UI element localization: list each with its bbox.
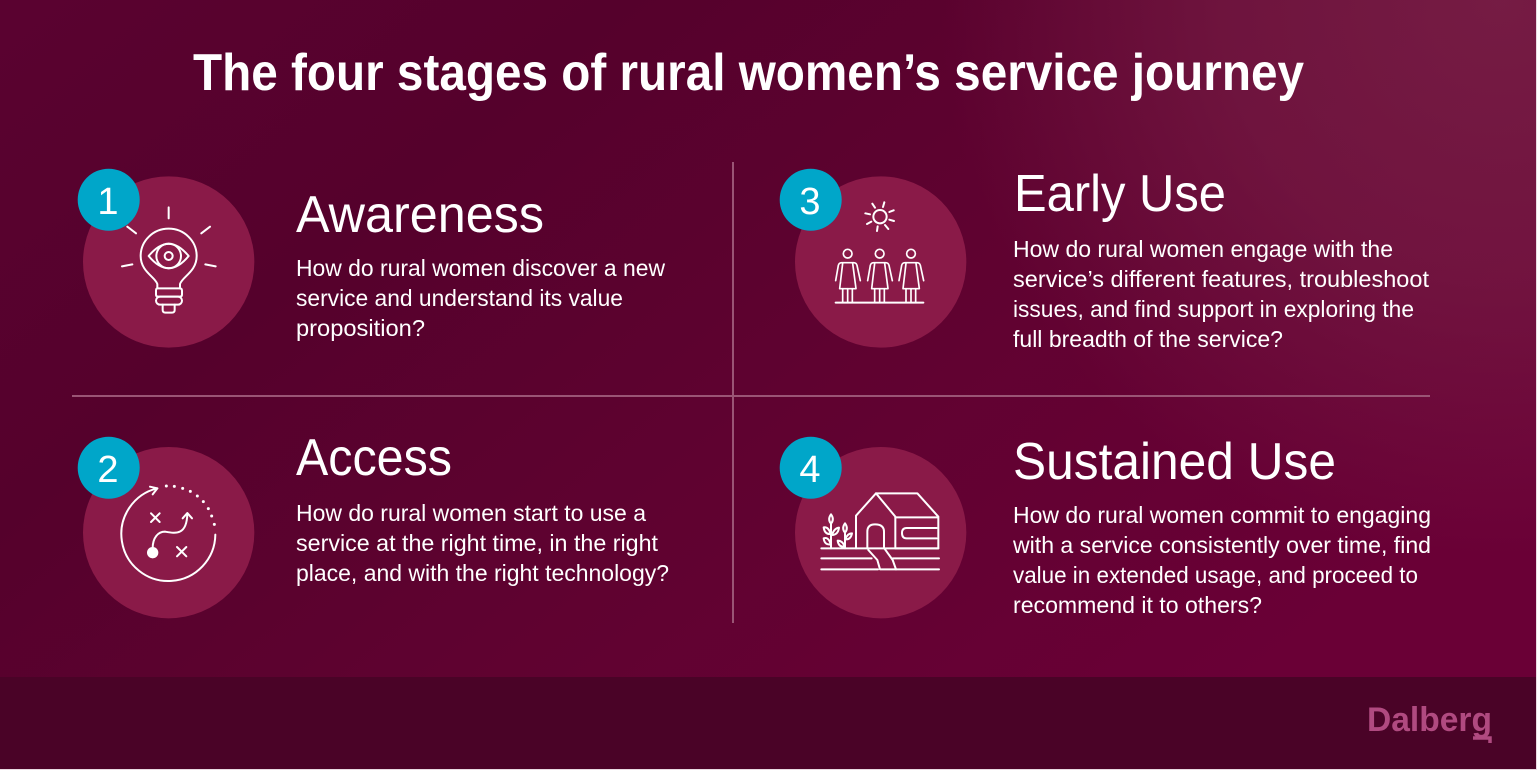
icon: house with plants: [795, 447, 966, 618]
divider: horizontal: [72, 395, 1430, 397]
woman figure left: [836, 249, 860, 303]
title: The four stages of rural women’s service journey: [193, 44, 1304, 102]
text: sustained use description: with a service consistently over time, find: [1012, 532, 1431, 558]
text: early use description: full breadth of the service?: [1013, 326, 1283, 352]
panel: stage 3 early use: [780, 165, 1430, 352]
panel: stage 2 access: [78, 429, 669, 618]
text: access description: [296, 500, 669, 586]
text: sustained use description: [1012, 502, 1431, 618]
icon: light bulb with eye: [83, 176, 254, 348]
panel: stage 1 awareness: [78, 169, 665, 348]
text: sustained use description: value in extended usage, and proceed to: [1013, 562, 1418, 588]
text: awareness description: How do rural women discover a new: [296, 255, 665, 281]
divider: vertical: [732, 162, 734, 623]
badge: number 1: 1: [97, 181, 119, 223]
text: sustained use description: recommend it to others?: [1013, 592, 1262, 618]
text: access description: place, and with the right technology?: [296, 560, 669, 586]
badge: number 4: [780, 437, 842, 499]
text: early use description: issues, and find support in exploring the: [1013, 296, 1414, 322]
text: early use description: How do rural women engage with the: [1013, 236, 1393, 262]
heading: Access: Access: [296, 429, 452, 487]
heading: Awareness: Awareness: [296, 186, 544, 244]
footer band: [0, 677, 1537, 770]
badge: number 3: 3: [799, 181, 821, 223]
badge: number 1: [78, 169, 140, 231]
text: early use description: service’s different features, troubleshoot: [1013, 266, 1430, 292]
woman figure right: [899, 249, 924, 303]
icon: three women under the sun: [795, 176, 966, 348]
text: early use description: [1013, 236, 1430, 352]
text: awareness description: proposition?: [296, 315, 425, 341]
badge: number 2: 2: [97, 449, 119, 491]
heading: Early Use: Early Use: [1014, 165, 1226, 223]
badge: number 2: [78, 437, 140, 499]
heading: Sustained Use: Sustained Use: [1013, 433, 1336, 491]
badge: number 4: 4: [799, 449, 821, 491]
panel: stage 4 sustained use: [780, 433, 1431, 618]
logo: Dalberg: Dalberg: [1367, 701, 1492, 739]
woman figure middle: [868, 249, 892, 303]
icon: route with arrows: [83, 447, 254, 618]
badge: number 3: [780, 169, 842, 231]
text: access description: service at the right time, in the right: [296, 530, 659, 556]
text: sustained use description: How do rural women commit to engaging: [1013, 502, 1431, 528]
text: access description: How do rural women start to use a: [296, 500, 646, 526]
text: awareness description: service and understand its value: [296, 285, 623, 311]
text: awareness description: [296, 255, 665, 341]
